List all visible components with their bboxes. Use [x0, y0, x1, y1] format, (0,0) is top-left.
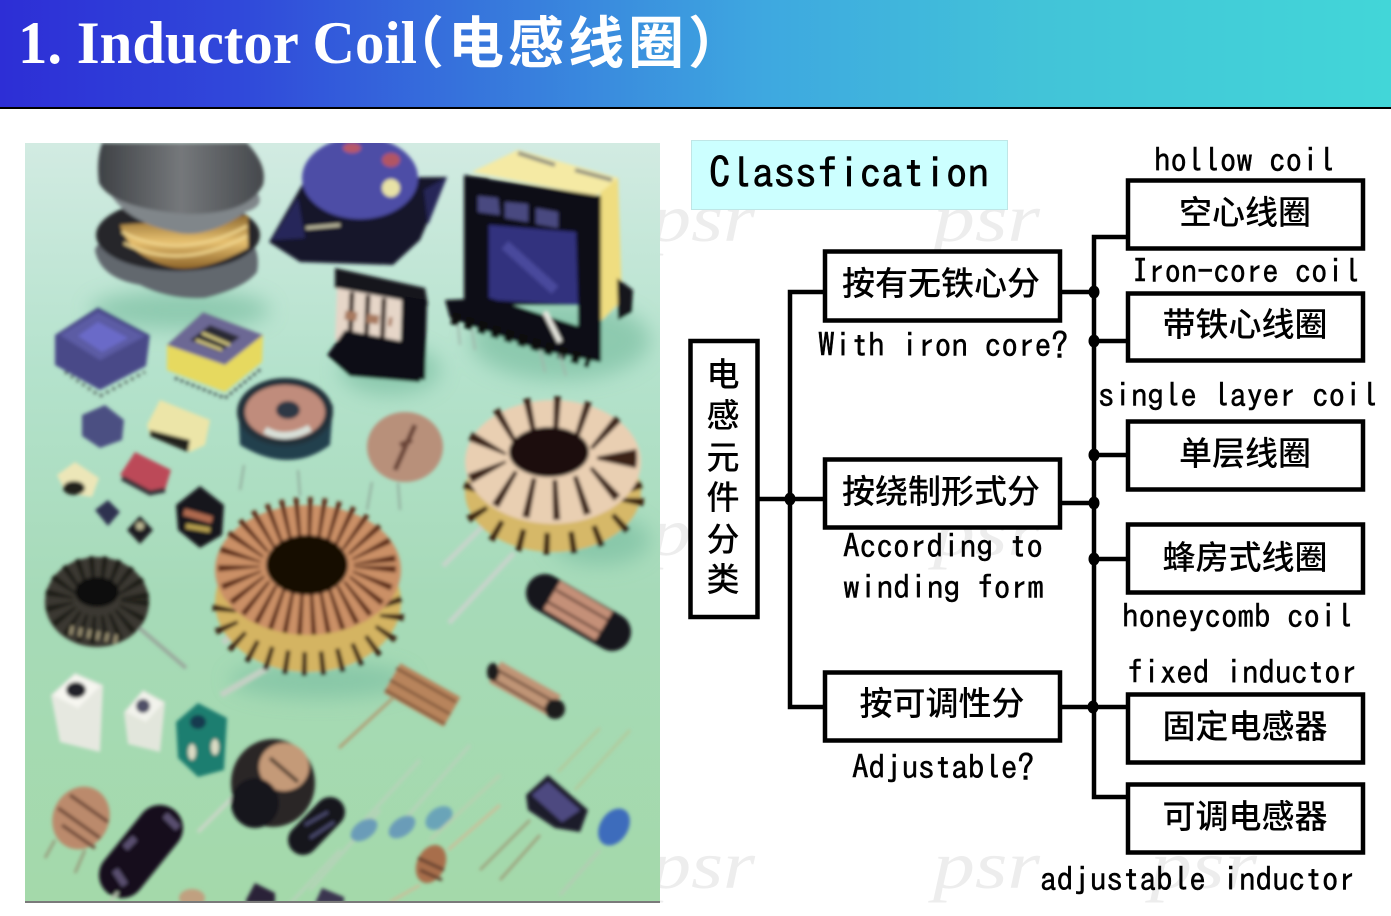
- watermarks: psr: psr: [645, 827, 756, 903]
- branch: by winding form: winding form: [843, 570, 1044, 603]
- root box: inductor component classification: 类: [706, 553, 740, 601]
- branch: by winding form: 按绕制形式分: [842, 465, 1040, 513]
- branch: by iron core: 按有无铁心分: [842, 257, 1040, 305]
- large cream toroid: [443, 400, 641, 623]
- title: 1. Inductor Coil: [18, 10, 417, 76]
- leaf: iron-core coil: Iron-core coil: [1132, 254, 1360, 287]
- leaf: fixed inductor: fixed inductor: [1127, 655, 1357, 688]
- header banner: [0, 0, 1391, 109]
- root box: inductor component classification: 件: [706, 471, 740, 519]
- root box: inductor component classification: 电: [706, 348, 740, 396]
- branch: by adjustability: [825, 672, 1060, 783]
- leaf: honeycomb coil: [1122, 524, 1363, 632]
- leaf: honeycomb coil: honeycomb coil: [1122, 599, 1353, 632]
- title: [18, 0, 748, 80]
- watermarks: psr: psr: [928, 827, 1041, 903]
- watermarks: psr: psr: [928, 180, 1041, 256]
- watermarks: psr: psr: [645, 180, 756, 256]
- leaf: iron-core coil: 带铁心线圈: [1162, 298, 1328, 346]
- bottom left pink coil and black coils: [42, 777, 178, 905]
- tall transformer with blue winding: [445, 150, 633, 376]
- large copper toroid: [215, 505, 401, 695]
- watermarks: psr: psr: [645, 494, 756, 570]
- root box: inductor component classification: [690, 341, 758, 617]
- branch: by adjustability: 按可调性分: [860, 677, 1024, 725]
- small pink round inductor: [367, 412, 443, 510]
- leaf: adjustable inductor: [1040, 784, 1363, 895]
- branch: by iron core: [818, 252, 1068, 361]
- leaf: iron-core coil: [1128, 254, 1363, 360]
- small rod coils: [339, 663, 565, 748]
- leaf: fixed inductor: 固定电感器: [1162, 700, 1328, 748]
- leaf: single layer coil: [1098, 378, 1378, 490]
- leaf: adjustable inductor: adjustable inductor: [1040, 862, 1355, 895]
- small black transformer: [327, 268, 428, 382]
- leaf: single layer coil: 单层线圈: [1179, 427, 1311, 475]
- root box: inductor component classification: 分: [706, 513, 740, 561]
- watermarks: psr: psr: [1145, 827, 1258, 903]
- root box: inductor component classification: 元: [706, 431, 740, 479]
- rod inductor with dark caps: [545, 590, 612, 632]
- yellow square transformer: [167, 312, 263, 398]
- blue-based pink toroid: [237, 378, 333, 496]
- purple bobbin and blue choke: [179, 728, 636, 907]
- classification heading: Classfication: [709, 152, 989, 194]
- leaf: fixed inductor: [1127, 655, 1363, 762]
- root box: inductor component classification: 感: [706, 389, 740, 437]
- small dark coil and blue chokes: [303, 775, 500, 902]
- purple cylinder inductor: [269, 137, 447, 265]
- white trimmer inductors and green trimmer: [51, 673, 227, 777]
- title: （电感线圈）: [388, 0, 748, 80]
- large drum coil and leads: [198, 739, 470, 916]
- classification heading: [692, 140, 1008, 210]
- branch: by iron core: With iron core?: [818, 328, 1068, 361]
- watermarks: psr: psr: [928, 494, 1041, 570]
- leaf: hollow coil: [1128, 143, 1363, 248]
- SMD power inductor: [95, 143, 264, 298]
- tiny assorted transformers: [57, 400, 224, 548]
- dark toroid: [45, 557, 186, 668]
- leaf: hollow coil: 空心线圈: [1179, 186, 1311, 234]
- leaf: hollow coil: hollow coil: [1154, 143, 1335, 176]
- leaf: honeycomb coil: 蜂房式线圈: [1162, 531, 1328, 579]
- leaf: adjustable inductor: 可调电感器: [1162, 790, 1328, 838]
- blue square transformer: [55, 307, 150, 396]
- connector lines: [758, 237, 1127, 797]
- photo: assorted inductors and coils: [25, 137, 660, 916]
- watermarks: psr: [645, 180, 1258, 903]
- branch: by winding form: [825, 460, 1060, 603]
- branch: by winding form: According to: [843, 529, 1043, 562]
- branch: by adjustability: Adjustable?: [852, 750, 1034, 783]
- leaf: single layer coil: single layer coil: [1098, 378, 1378, 411]
- shadows: [90, 290, 650, 698]
